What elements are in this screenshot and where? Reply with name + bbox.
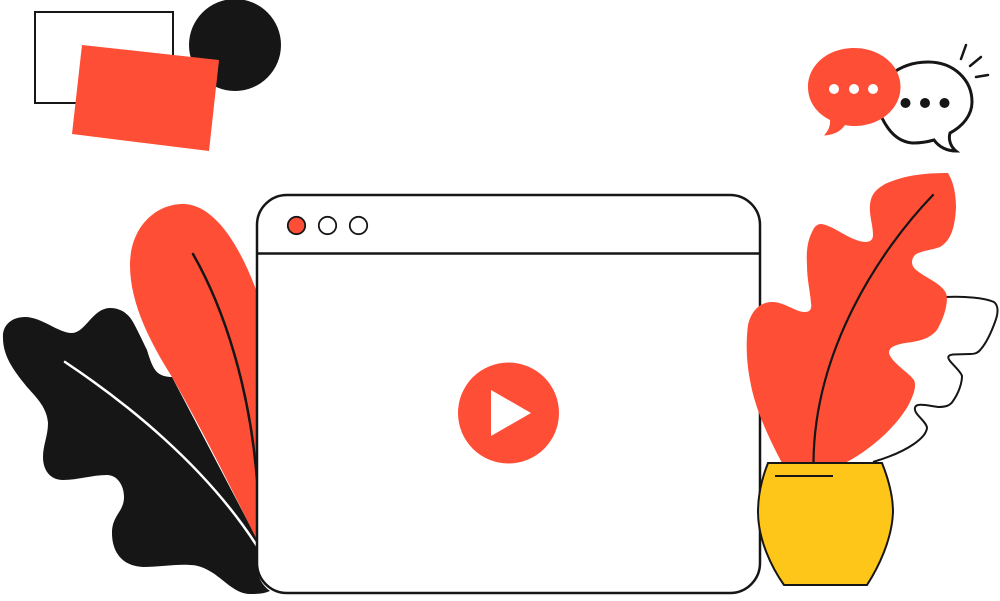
black leaf xyxy=(3,308,270,594)
play button xyxy=(458,362,559,464)
red leaf vein xyxy=(193,254,257,480)
white outline rectangle top left xyxy=(35,12,173,103)
white bubble dots xyxy=(900,98,950,108)
spark lines xyxy=(961,45,988,77)
white speech bubble xyxy=(882,62,972,151)
window buttons xyxy=(288,217,367,234)
right leaf vein xyxy=(814,195,933,463)
red tilted rectangle xyxy=(72,45,219,151)
red leaf left xyxy=(130,204,258,540)
black leaf vein xyxy=(65,362,257,546)
red speech bubble xyxy=(808,48,900,136)
browser window xyxy=(257,195,760,593)
yellow pot xyxy=(758,463,893,585)
pot highlight line xyxy=(775,475,833,477)
red leaf right xyxy=(747,173,956,463)
window header line xyxy=(257,252,760,255)
speech bubbles xyxy=(808,45,988,151)
black circle top xyxy=(189,0,281,91)
white leaf right xyxy=(873,297,998,462)
red bubble dots xyxy=(829,84,878,94)
